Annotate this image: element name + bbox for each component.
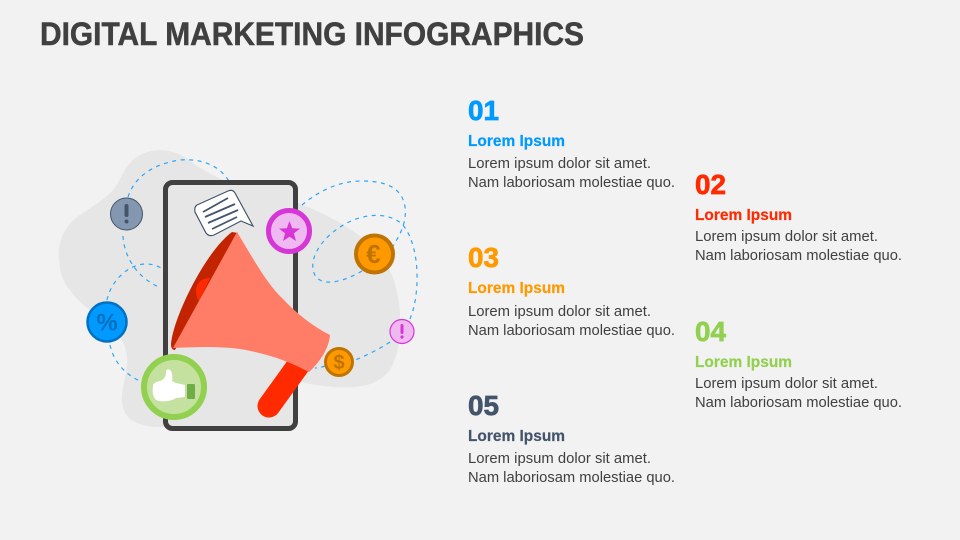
text block 05: Lorem Ipsum — [468, 428, 565, 445]
text block 01 — [468, 95, 675, 191]
text block 02 — [695, 169, 902, 264]
illustration: megaphone on phone — [59, 150, 417, 428]
megaphone handle — [269, 363, 300, 406]
text block 05: Nam laboriosam molestiae quo. — [468, 469, 675, 486]
text block 02: Lorem Ipsum — [695, 207, 792, 224]
text block 03: Nam laboriosam molestiae quo. — [468, 322, 675, 339]
icon: dollar coin — [326, 348, 352, 376]
text block 03: 03 — [468, 242, 499, 273]
text block 05 — [468, 390, 675, 486]
text block 03 — [468, 242, 675, 339]
icon: alert badge pink — [390, 320, 414, 344]
icon: thumbs up badge — [144, 357, 204, 417]
background blob — [59, 150, 400, 427]
text block 02: Nam laboriosam molestiae quo. — [695, 247, 902, 264]
text block 01: Nam laboriosam molestiae quo. — [468, 174, 675, 191]
text block 04: Lorem Ipsum — [695, 354, 792, 371]
text block 03: Lorem Ipsum — [468, 280, 565, 297]
text block 04: Lorem ipsum dolor sit amet. — [695, 375, 878, 392]
text block 03: Lorem ipsum dolor sit amet. — [468, 303, 651, 320]
megaphone cone — [173, 232, 330, 372]
megaphone — [171, 232, 330, 406]
text block 05: 05 — [468, 390, 499, 421]
icon: dollar coin: $ — [333, 352, 345, 374]
phone frame — [166, 182, 296, 428]
icon: star badge — [268, 210, 310, 252]
text block 04 — [695, 316, 902, 411]
megaphone inner highlight — [196, 278, 210, 301]
text block 01: Lorem Ipsum — [468, 133, 565, 150]
icon: percent badge: % — [96, 310, 118, 336]
text block 05: Lorem ipsum dolor sit amet. — [468, 450, 651, 467]
text block 01: 01 — [468, 95, 499, 126]
dashed connector paths — [107, 160, 417, 381]
title: DIGITAL MARKETING INFOGRAPHICS — [40, 16, 584, 52]
icon: euro coin: € — [366, 239, 381, 269]
text block 02: 02 — [695, 169, 726, 200]
icon: euro coin — [356, 236, 393, 272]
icon: warning badge — [110, 198, 142, 230]
icon: percent badge — [88, 302, 126, 342]
text block 02: Lorem ipsum dolor sit amet. — [695, 228, 878, 245]
icon: speech bubble — [195, 190, 253, 236]
text block 04: Nam laboriosam molestiae quo. — [695, 394, 902, 411]
text block 01: Lorem ipsum dolor sit amet. — [468, 155, 651, 172]
megaphone back rim — [171, 232, 238, 350]
text block 04: 04 — [695, 316, 726, 347]
